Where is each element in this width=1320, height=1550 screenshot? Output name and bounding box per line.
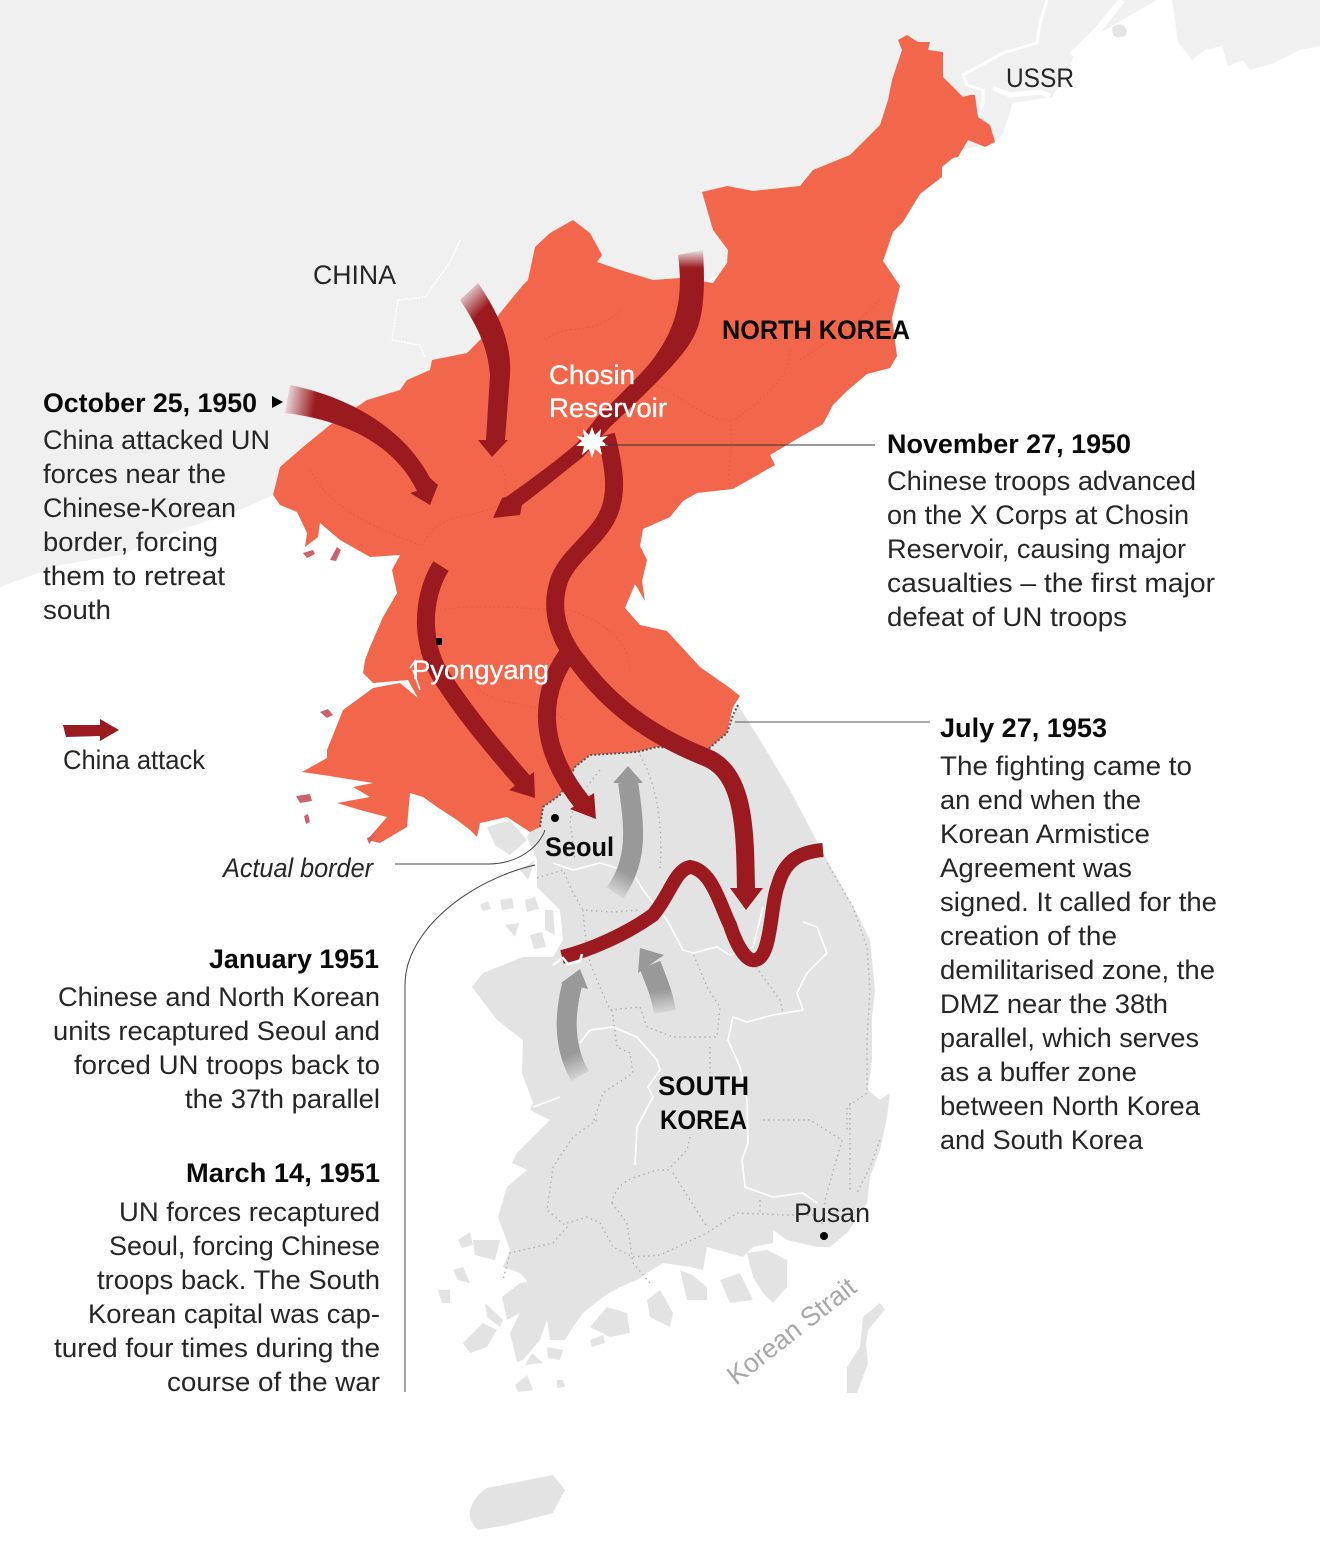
callout: November 27, 1950: Reservoir, causing major	[887, 534, 1186, 564]
arrow: Yalu attack west	[285, 385, 438, 505]
callout: November 27, 1950: casualties – the first major	[887, 568, 1215, 598]
label: Actual border: Actual border	[221, 853, 374, 883]
map: China and USSR landmass	[0, 0, 1320, 587]
arrow: attack to Seoul from west	[426, 566, 535, 798]
arrow: attack to east coast	[555, 435, 763, 910]
callout: November 27, 1950	[887, 429, 1215, 632]
map: South Korea provinces and rivers	[503, 755, 880, 1283]
icon: battle burst at Chosin	[576, 427, 608, 458]
callout: January 1951: Chinese and North Korean	[58, 982, 380, 1012]
callout: October 25, 1950: forces near the	[43, 459, 226, 489]
label: Pusan: Pusan	[794, 1198, 870, 1228]
callout: July 27, 1953: between North Korea	[940, 1091, 1201, 1121]
callout: January 1951: the 37th parallel	[185, 1084, 380, 1114]
callout: July 27, 1953: demilitarised zone, the	[940, 955, 1215, 985]
callout: March 14, 1951	[54, 1158, 380, 1397]
callout: July 27, 1953: an end when the	[940, 785, 1141, 815]
callout: July 27, 1953: Agreement was	[940, 853, 1132, 883]
callout: October 25, 1950: border, forcing	[43, 527, 218, 557]
label: Pyongyang: Pyongyang	[412, 655, 549, 685]
callout: November 27, 1950: on the X Corps at Chosin	[887, 500, 1189, 530]
callout: July 27, 1953: creation of the	[940, 921, 1117, 951]
callout: October 25, 1950: them to retreat	[43, 561, 226, 591]
callout: October 25, 1950: October 25, 1950	[43, 388, 257, 418]
callout: October 25, 1950: China attacked UN	[43, 425, 270, 455]
callout: October 25, 1950: Chinese-Korean	[43, 493, 236, 523]
callout: January 1951	[53, 944, 380, 1114]
callout: November 27, 1950: defeat of UN troops	[887, 602, 1127, 632]
leader: armistice callout	[735, 721, 930, 723]
label: China: CHINA	[313, 260, 396, 290]
callout: November 27, 1950: Chinese troops advanced	[887, 466, 1196, 496]
callout: October 25, 1950	[43, 388, 283, 625]
arrow: attack from north via Chosin	[493, 250, 704, 518]
callout: March 14, 1951: Seoul, forcing Chinese	[109, 1231, 380, 1261]
label: USSR: USSR	[1006, 63, 1074, 93]
map: North Korean islands	[296, 547, 377, 844]
callout: July 27, 1953	[940, 713, 1217, 1155]
label: Korean Strait: Korean Strait	[721, 1271, 862, 1391]
callout: March 14, 1951: UN forces recaptured	[119, 1197, 380, 1227]
map: southern and western islands	[438, 820, 885, 1530]
map: South Korea	[438, 705, 890, 1530]
arrow: UN advance west	[561, 969, 588, 1076]
callout: July 27, 1953: and South Korea	[940, 1125, 1144, 1155]
callout: March 14, 1951: troops back. The South	[97, 1265, 380, 1295]
marker: Seoul	[551, 814, 559, 822]
label: South Korea	[658, 1071, 749, 1135]
arrow: UN advance centre	[613, 766, 643, 893]
leader: January and March callouts	[405, 865, 535, 1392]
arrow: central attack	[460, 283, 510, 457]
callout: July 27, 1953: July 27, 1953	[940, 713, 1107, 743]
callout: January 1951: January 1951	[209, 944, 379, 974]
callout: January 1951: forced UN troops back to	[74, 1050, 380, 1080]
label: North Korea: NORTH KOREA	[722, 315, 910, 345]
callout: November 27, 1950: November 27, 1950	[887, 429, 1131, 459]
label: Chosin Reservoir: Reservoir	[549, 393, 667, 423]
label: South Korea: KOREA	[660, 1105, 747, 1135]
label: Chosin Reservoir: Chosin	[549, 360, 635, 390]
icon: legend arrow	[63, 719, 119, 741]
callout: March 14, 1951: course of the war	[167, 1367, 380, 1397]
label: South Korea: SOUTH	[658, 1071, 749, 1101]
marker: Pyongyang	[436, 638, 442, 645]
callout: July 27, 1953: signed. It called for the	[940, 887, 1217, 917]
label: Seoul: Seoul	[545, 832, 614, 862]
map: North Korea	[273, 35, 995, 844]
callout: July 27, 1953: Korean Armistice	[940, 819, 1150, 849]
leader: actual border	[395, 830, 545, 864]
callout: March 14, 1951: Korean capital was cap-	[88, 1299, 380, 1329]
arrow: UN advance east	[638, 948, 665, 1012]
map: Armistice border	[540, 705, 738, 827]
legend: China attack: China attack	[63, 745, 205, 775]
legend: China attack	[63, 719, 205, 775]
arrow: front line	[553, 850, 823, 965]
callout: January 1951: units recaptured Seoul and	[53, 1016, 380, 1046]
callout: July 27, 1953: DMZ near the 38th	[940, 989, 1168, 1019]
marker: Pusan	[820, 1232, 828, 1240]
leader: Chosin Reservoir callout	[605, 444, 875, 446]
arrow: attack to Seoul from centre	[547, 647, 596, 819]
callout: July 27, 1953: parallel, which serves	[940, 1023, 1199, 1053]
callout: March 14, 1951: March 14, 1951	[186, 1158, 380, 1188]
callout: October 25, 1950: south	[43, 595, 111, 625]
label: Chosin Reservoir	[549, 360, 667, 423]
callout: July 27, 1953: as a buffer zone	[940, 1057, 1137, 1087]
callout: March 14, 1951: tured four times during the	[54, 1333, 380, 1363]
callout: July 27, 1953: The fighting came to	[940, 751, 1192, 781]
